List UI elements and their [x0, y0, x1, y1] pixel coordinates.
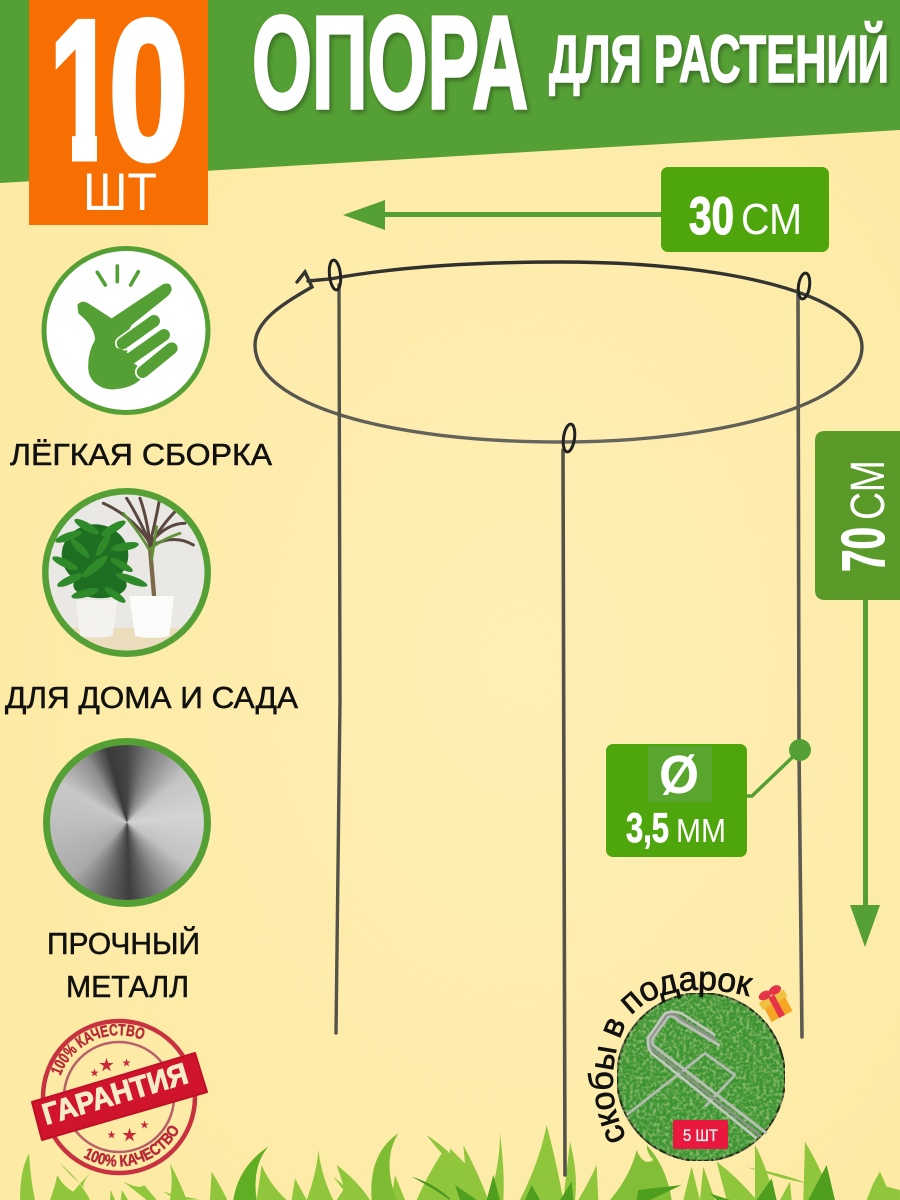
icon: gift box	[755, 983, 794, 1023]
quality guarantee stamp: ★	[140, 1120, 149, 1130]
ficus foliage	[62, 524, 128, 598]
width arrow	[343, 200, 665, 230]
quality guarantee stamp: 100% КАЧЕСТВО	[83, 1126, 178, 1167]
wire diameter callout	[606, 739, 811, 857]
quality guarantee stamp: ★	[107, 1130, 116, 1140]
orange quantity badge	[29, 0, 208, 225]
height label 70 cm: СМ	[842, 460, 895, 520]
quality guarantee stamp: ★	[122, 1058, 131, 1068]
header green band	[0, 0, 900, 183]
pots	[129, 596, 174, 638]
height label 70 cm: 70	[830, 527, 897, 572]
gift count tag: 5 ШТ	[683, 1126, 718, 1145]
width label 30 cm: 30	[689, 187, 734, 246]
staples	[627, 1012, 767, 1138]
wire diameter callout: Ø	[659, 745, 699, 805]
label: easy assembly: ЛЁГКАЯ СБОРКА	[10, 437, 272, 472]
quality guarantee stamp: ★	[90, 1068, 99, 1078]
wire diameter callout: 3,5	[626, 804, 669, 851]
gift count tag	[673, 1120, 728, 1149]
wire plant support	[255, 260, 862, 1175]
ring	[255, 262, 862, 442]
quality guarantee stamp	[31, 1018, 208, 1176]
dracaena	[103, 497, 193, 595]
height arrow	[850, 598, 880, 947]
icon: potted plants photo	[40, 488, 211, 660]
width label 30 cm	[661, 167, 829, 252]
width label 30 cm: СМ	[741, 195, 802, 244]
quality guarantee stamp: ★	[99, 1057, 114, 1074]
curved gift caption: скобы в подарок	[588, 972, 754, 1142]
quality guarantee stamp: ★	[122, 1127, 137, 1144]
right leg	[797, 272, 811, 1037]
gift: staples in grass	[617, 993, 785, 1161]
label: strong metal: МЕТАЛЛ	[66, 969, 189, 1004]
grass strip	[20, 1125, 900, 1200]
label: home and garden: ДЛЯ ДОМА И САДА	[5, 680, 298, 715]
wire diameter callout: ММ	[676, 812, 726, 849]
centre leg	[562, 423, 576, 1175]
orange quantity badge: ШТ	[83, 163, 157, 222]
quality guarantee stamp: 100% КАЧЕСТВО	[51, 1024, 145, 1076]
quality guarantee stamp: ГАРАНТИЯ	[39, 1057, 192, 1132]
label: strong metal: ПРОЧНЫЙ	[47, 925, 200, 961]
label: strong metal	[47, 925, 200, 1004]
left leg	[328, 260, 342, 1033]
height label 70 cm	[815, 431, 900, 600]
icon: easy assembly hand	[44, 248, 208, 412]
icon: brushed metal disc	[43, 738, 211, 907]
